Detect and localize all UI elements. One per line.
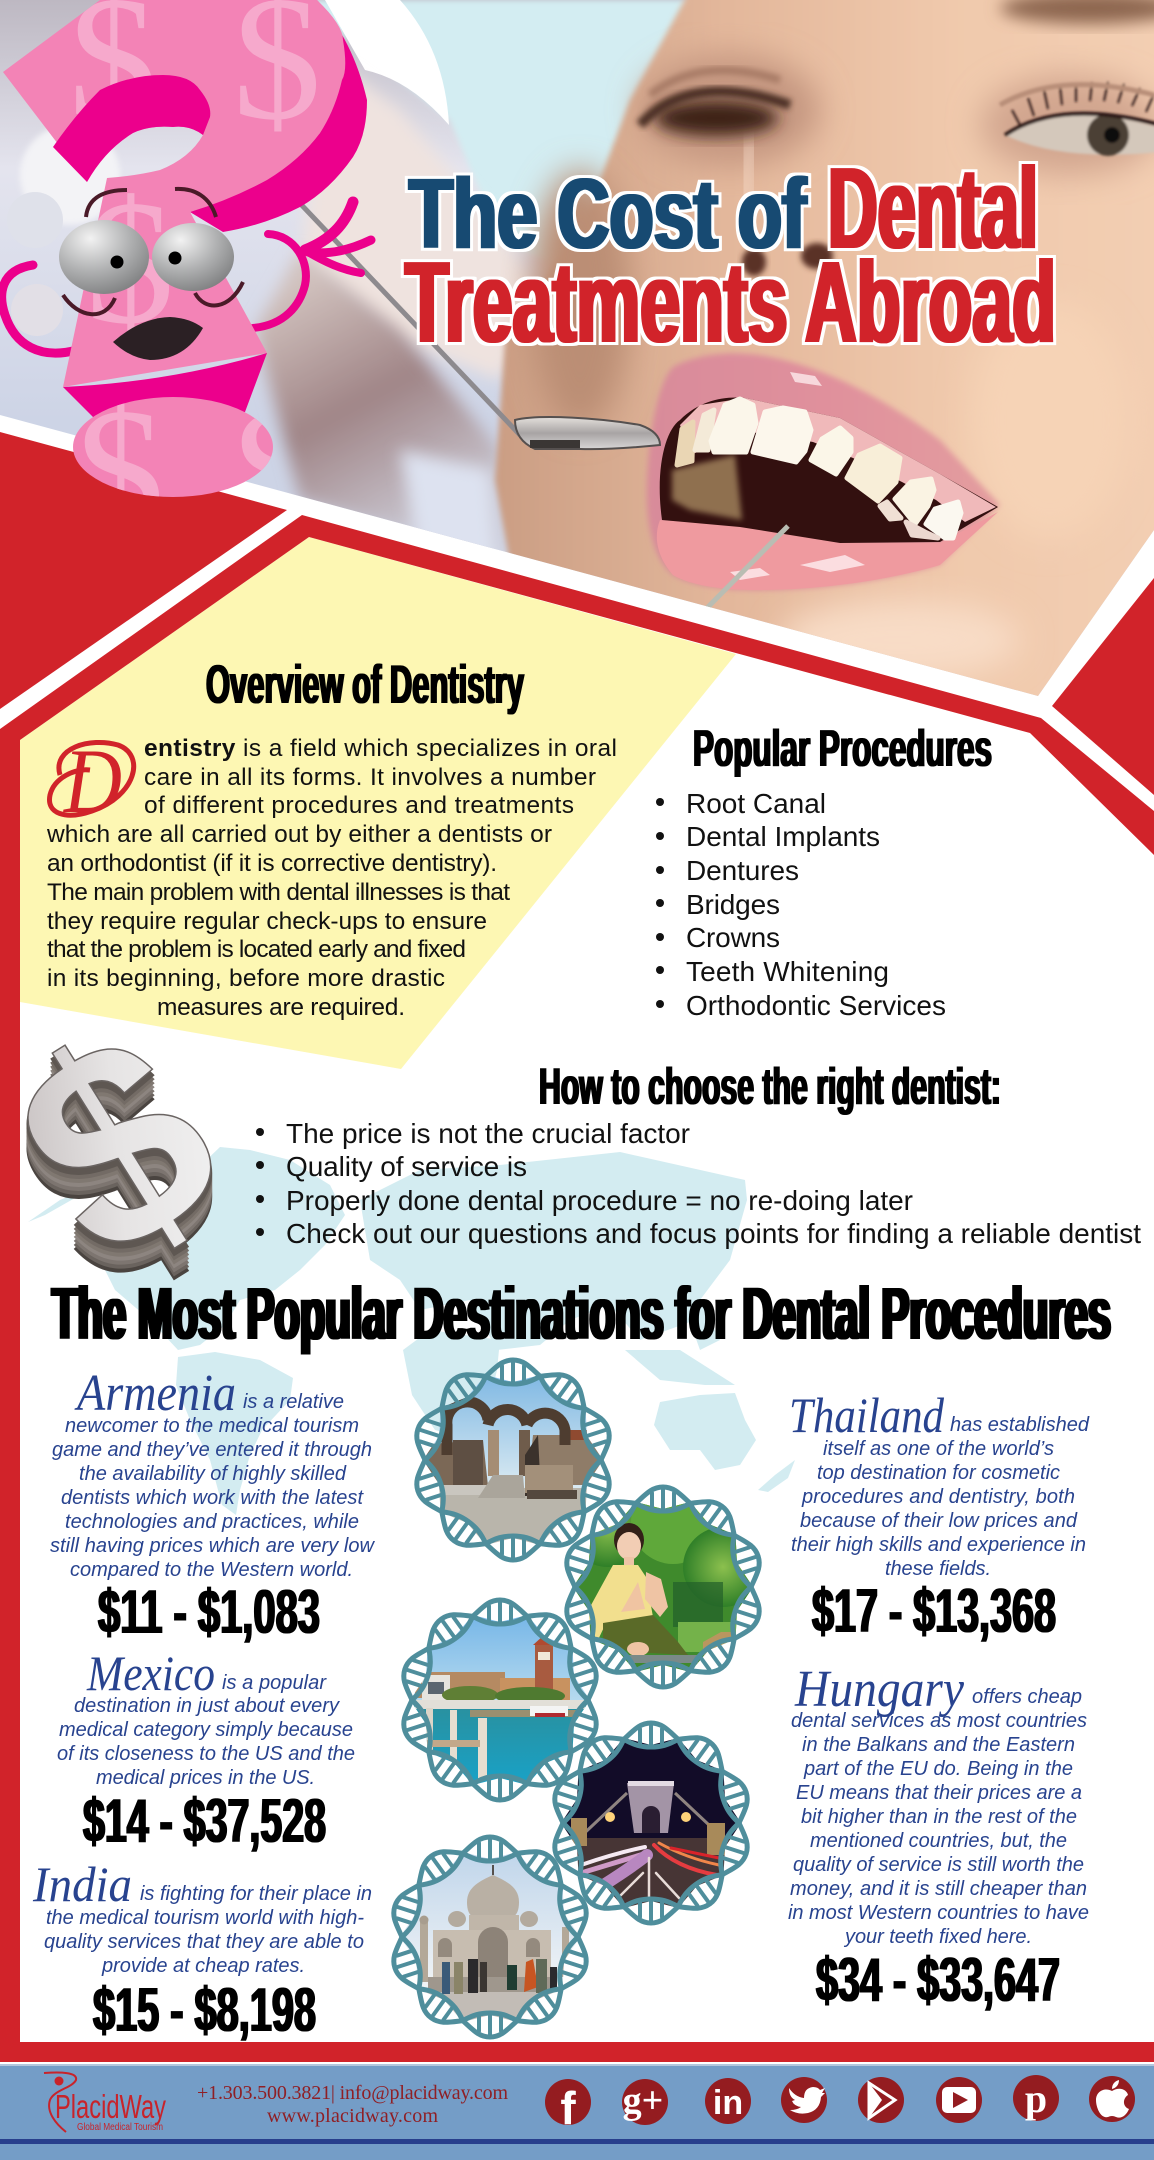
India text block: is fighting for their place in — [140, 1883, 372, 1905]
Hungary text block: offers cheap — [972, 1686, 1082, 1708]
medallion: Thailand woman — [559, 1480, 767, 1687]
icon: pinterest: p — [1025, 2076, 1047, 2121]
India text block: quality services that they are able to — [44, 1931, 364, 1953]
Hungary text block: in the Balkans and the Eastern — [802, 1734, 1075, 1756]
icon: twitter — [781, 2077, 827, 2123]
popular procedures list: Root Canal — [686, 788, 826, 819]
Armenia text block: Armenia — [74, 1365, 236, 1422]
title — [405, 143, 1056, 367]
Mexico text block: destination in just about every — [74, 1695, 340, 1717]
Hungary text block: EU means that their prices are a — [796, 1782, 1082, 1804]
popular procedures list — [656, 788, 946, 1021]
hero photo: smiling patient at dentist — [0, 0, 1154, 710]
Armenia text block — [50, 1365, 376, 1581]
mouth interior — [660, 398, 998, 543]
Thailand text block: has established — [950, 1414, 1090, 1436]
India text block: the medical tourism world with high- — [46, 1907, 364, 1929]
Thailand text block: top destination for cosmetic — [817, 1462, 1060, 1484]
Hungary text block: your teeth fixed here. — [843, 1926, 1032, 1948]
icon: facebook — [545, 2079, 591, 2134]
mascot: pink question mark with dollar signs: $ — [76, 371, 164, 569]
Hungary text block: part of the EU do. Being in the — [803, 1758, 1073, 1780]
icon: apple — [1089, 2076, 1135, 2122]
popular procedures list: Dental Implants — [686, 821, 880, 852]
Mexico text block: Mexico — [86, 1645, 215, 1701]
icon: play store — [858, 2077, 904, 2123]
Thailand text block: their high skills and experience in — [791, 1534, 1086, 1556]
overview text block: The main problem with dental illnesses is that — [47, 879, 510, 906]
Mexico text block: medical prices in the US. — [96, 1767, 315, 1789]
magenta band — [63, 353, 267, 417]
icon: google plus: g+ — [623, 2080, 663, 2122]
Armenia text block: game and they’ve entered it through — [52, 1439, 372, 1461]
overview text block: they require regular check-ups to ensure — [47, 908, 487, 935]
brows and cheeks — [63, 189, 243, 314]
red frame band — [0, 515, 1154, 2050]
Armenia text block: compared to the Western world. — [70, 1559, 353, 1581]
how to choose list: Quality of service is — [286, 1151, 527, 1182]
how to choose list — [256, 1118, 1141, 1249]
dental mirror — [294, 197, 520, 435]
icon: linkedin — [705, 2078, 751, 2124]
Mexico text block: medical category simply because — [59, 1719, 353, 1741]
question mark body — [3, 0, 345, 387]
mouth — [113, 317, 203, 360]
Armenia text block: is a relative — [243, 1391, 344, 1413]
drop cap D: D — [62, 730, 122, 832]
overview text block: measures are required. — [157, 994, 405, 1021]
face skin — [495, 0, 1154, 710]
Thailand text block: these fields. — [885, 1558, 991, 1580]
overview text block — [46, 730, 617, 1021]
popular procedures list: Bridges — [686, 889, 780, 920]
Armenia text block: technologies and practices, while — [65, 1511, 359, 1533]
Armenia text block: the availability of highly skilled — [79, 1463, 347, 1485]
dollar watermarks — [76, 0, 316, 331]
Thailand text block — [789, 1387, 1090, 1580]
Mexico text block: of its closeness to the US and the — [57, 1743, 355, 1765]
popular procedures list: Crowns — [686, 922, 780, 953]
Hungary text block — [788, 1661, 1089, 1948]
Armenia price: $11 - $1,083 — [98, 1578, 320, 1647]
icon: linkedin: in — [713, 2084, 743, 2122]
icon: pinterest — [1013, 2075, 1059, 2121]
eye right — [1000, 82, 1154, 156]
world map background — [28, 1147, 795, 1515]
lips — [647, 353, 1000, 590]
Hungary text block: mentioned countries, but, the — [810, 1830, 1067, 1852]
eyes — [59, 220, 149, 294]
how to choose list: Check out our questions and focus points for finding a reliable dentist — [286, 1218, 1141, 1249]
Mexico text block: is a popular — [222, 1672, 327, 1694]
Thailand text block: itself as one of the world’s — [823, 1438, 1054, 1460]
right arm and hand — [253, 202, 371, 328]
Armenia text block: still having prices which are very low — [50, 1535, 376, 1557]
Mexico price: $14 - $37,528 — [83, 1787, 326, 1856]
how to choose list: Properly done dental procedure = no re-doing later — [286, 1185, 913, 1216]
India price: $15 - $8,198 — [93, 1976, 316, 2045]
footer contact text: +1.303.500.3821| info@placidway.com — [197, 2082, 508, 2104]
overview text block: which are all carried out by either a dentists or — [46, 821, 552, 848]
Hungary text block: Hungary — [794, 1661, 965, 1718]
footer band — [0, 2064, 1154, 2160]
title: The Cost of — [409, 158, 807, 270]
India text block — [32, 1856, 372, 1977]
medallion: India Taj Mahal — [386, 1837, 594, 2037]
gums — [680, 398, 996, 522]
eye left — [654, 100, 778, 136]
icon: facebook: f — [560, 2082, 576, 2134]
popular procedures list: Dentures — [686, 855, 799, 886]
icon: youtube — [936, 2077, 982, 2123]
overview text block: care in all its forms. It involves a number — [144, 764, 596, 791]
mascot: pink question mark with dollar signs: $ — [232, 371, 322, 569]
overview text block: that the problem is located early and fixed — [47, 936, 466, 963]
medallion: Hungary chain bridge at night — [547, 1723, 755, 1923]
bottom red bar — [0, 2042, 1154, 2062]
Hungary text block: dental services as most countries — [791, 1710, 1087, 1732]
India text block: provide at cheap rates. — [101, 1955, 305, 1977]
teeth — [677, 399, 961, 538]
overview heading: Overview of Dentistry — [206, 653, 524, 715]
Armenia text block: newcomer to the medical tourism — [65, 1415, 359, 1437]
question mark back shade — [190, 0, 367, 232]
Armenia text block: dentists which work with the latest — [61, 1487, 364, 1509]
overview text block: of different procedures and treatments — [144, 792, 574, 819]
popular procedures list: Teeth Whitening — [686, 956, 889, 987]
India text block: India — [32, 1856, 132, 1912]
Mexico text block — [57, 1645, 355, 1789]
footer logo: PlacidWay — [44, 2073, 166, 2133]
how to choose list: The price is not the crucial factor — [286, 1118, 690, 1149]
Thailand text block: Thailand — [789, 1387, 945, 1443]
red corner triangle, top left — [0, 432, 287, 709]
overview text block: in its beginning, before more drastic — [47, 965, 445, 992]
ball — [73, 397, 273, 497]
Thailand text block: because of their low prices and — [800, 1510, 1078, 1532]
footer contact text: www.placidway.com — [267, 2105, 438, 2127]
Hungary text block: in most Western countries to have — [788, 1902, 1089, 1924]
medallion: Armenia ruins — [409, 1360, 617, 1560]
footer logo: PlacidWay: PlacidWay — [55, 2088, 166, 2125]
nostril shadows — [742, 248, 766, 276]
Hungary text block: money, and it is still cheaper than — [790, 1878, 1087, 1900]
Thailand text block: procedures and dentistry, both — [801, 1486, 1075, 1508]
Hungary text block: bit higher than in the rest of the — [801, 1806, 1077, 1828]
dollar watermarks: $ — [86, 163, 174, 361]
popular procedures list: Orthodontic Services — [686, 990, 946, 1021]
crescent — [53, 75, 210, 182]
dental pick — [707, 526, 788, 608]
footer logo: PlacidWay: Global Medical Tourism — [77, 2122, 163, 2133]
yellow overview panel — [20, 537, 736, 1069]
mascot: pink question mark with dollar signs — [0, 0, 376, 497]
overview text block: entistry is a field which specializes in oral — [144, 735, 617, 762]
footer contact text — [197, 2082, 508, 2127]
medallion: Mexico marina — [396, 1600, 604, 1800]
Hungary text block: quality of service is still worth the — [793, 1854, 1084, 1876]
overview text block: an orthodontist (if it is corrective dentistry). — [47, 850, 497, 877]
left arm — [2, 265, 77, 353]
red corner triangle, right — [1052, 578, 1154, 795]
